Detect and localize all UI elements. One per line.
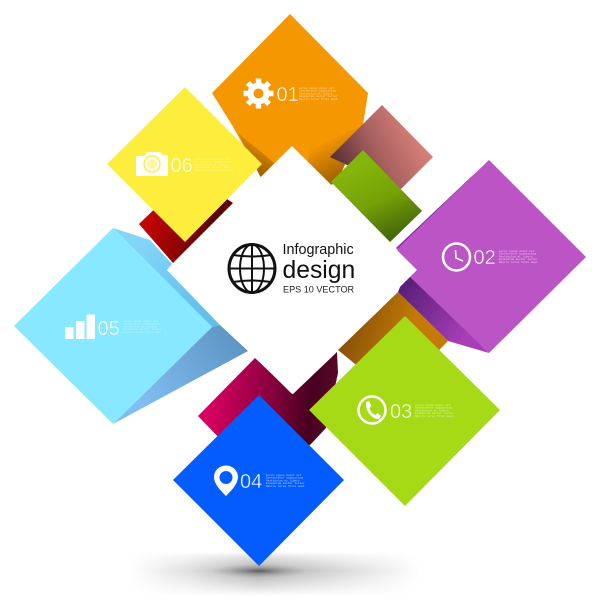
lorem text 06: Vestibulum at libero	[195, 162, 229, 166]
icon: clock	[443, 244, 470, 270]
panel: brown back tile	[338, 292, 448, 390]
icon: bars	[65, 314, 95, 339]
panel 03: lime tile	[309, 316, 500, 506]
lorem text 01: Vestibulum at libero	[299, 91, 333, 95]
icon: camera	[136, 152, 168, 176]
lorem text 02: Lorem ipsum dolor sit	[499, 249, 535, 253]
lorem text 02: Vestibulum at libero	[499, 254, 533, 258]
number 06: 06	[170, 155, 193, 177]
orange tile left shade	[238, 133, 285, 190]
light blue lower fold	[113, 325, 248, 424]
lorem text 04: Elementum auctor tortor	[266, 481, 305, 485]
icon: globe	[229, 244, 275, 292]
lorem text 03: Elementum auctor tortor	[415, 411, 454, 415]
lorem text 06: Elementum auctor tortor	[195, 165, 234, 169]
lorem text 05: Vestibulum at libero	[123, 324, 157, 328]
heading: design: design	[282, 257, 355, 284]
number 04: 04	[240, 471, 262, 493]
lorem text 05: Elementum auctor tortor	[123, 327, 162, 331]
lorem text 05: Consectetur adipiscing	[123, 322, 160, 326]
number 02: 02	[474, 247, 496, 269]
icon: phone	[358, 396, 386, 424]
lorem text 01: Mauris lorem felis amet	[299, 97, 338, 101]
ground shadow	[145, 554, 404, 594]
light blue tile face	[14, 228, 212, 424]
panel: rose back tile	[330, 105, 433, 190]
lorem text 01: Elementum auctor tortor	[299, 94, 338, 98]
lorem text 06: Mauris lorem felis amet	[195, 168, 234, 172]
panel: crimson back tile	[198, 352, 338, 470]
panel 04: blue tile	[173, 395, 344, 566]
number 05: 05	[98, 318, 120, 340]
purple lower fold	[398, 272, 489, 353]
panel 01: orange tile	[212, 14, 368, 200]
subheading: EPS 10 VECTOR: EPS 10 VECTOR	[283, 284, 355, 294]
lorem text 03: Mauris lorem felis amet	[415, 414, 454, 418]
icon: map pin	[214, 466, 238, 496]
lorem text 02: Elementum auctor tortor	[499, 257, 538, 261]
orange tile face	[212, 14, 368, 200]
lorem text 01: Consectetur adipiscing	[299, 89, 336, 93]
lorem text 05: Lorem ipsum dolor sit	[123, 319, 159, 323]
lorem text 03: Consectetur adipiscing	[415, 406, 452, 410]
purple thin fold	[396, 167, 482, 252]
lorem text 04: Lorem ipsum dolor sit	[266, 473, 302, 477]
lorem text 01: Lorem ipsum dolor sit	[299, 86, 335, 90]
lorem text 05: Mauris lorem felis amet	[123, 330, 162, 334]
heading: Infographic: Infographic	[282, 242, 354, 258]
orange tile right shade	[300, 125, 363, 200]
panel: dark red back tile	[139, 175, 233, 263]
icon: gear	[244, 78, 274, 108]
panel: white centre diamond	[167, 146, 417, 394]
lorem text 04: Consectetur adipiscing	[266, 476, 303, 480]
number 01: 01	[276, 84, 299, 106]
lorem text 06: Consectetur adipiscing	[195, 160, 232, 164]
panel 05: light blue tile	[14, 228, 248, 424]
lorem text 06: Lorem ipsum dolor sit	[195, 157, 231, 161]
white diamond face	[167, 146, 417, 394]
panel: green overlay tile	[331, 150, 422, 242]
panel 06: yellow tile	[107, 87, 262, 242]
blue tile face	[173, 395, 344, 566]
number 03: 03	[390, 401, 412, 423]
lorem text 02: Mauris lorem felis amet	[499, 260, 538, 264]
purple tile face	[397, 160, 586, 353]
lorem text 02: Consectetur adipiscing	[499, 252, 536, 256]
lorem text 04: Mauris lorem felis amet	[266, 484, 305, 488]
light blue top fold	[113, 228, 220, 327]
lorem text 04: Vestibulum at libero	[266, 478, 300, 482]
lorem text 03: Lorem ipsum dolor sit	[415, 403, 451, 407]
panel 02: purple tile	[396, 160, 586, 353]
yellow tile face	[107, 87, 262, 242]
lorem text 03: Vestibulum at libero	[415, 408, 449, 412]
lime tile face	[309, 316, 500, 506]
